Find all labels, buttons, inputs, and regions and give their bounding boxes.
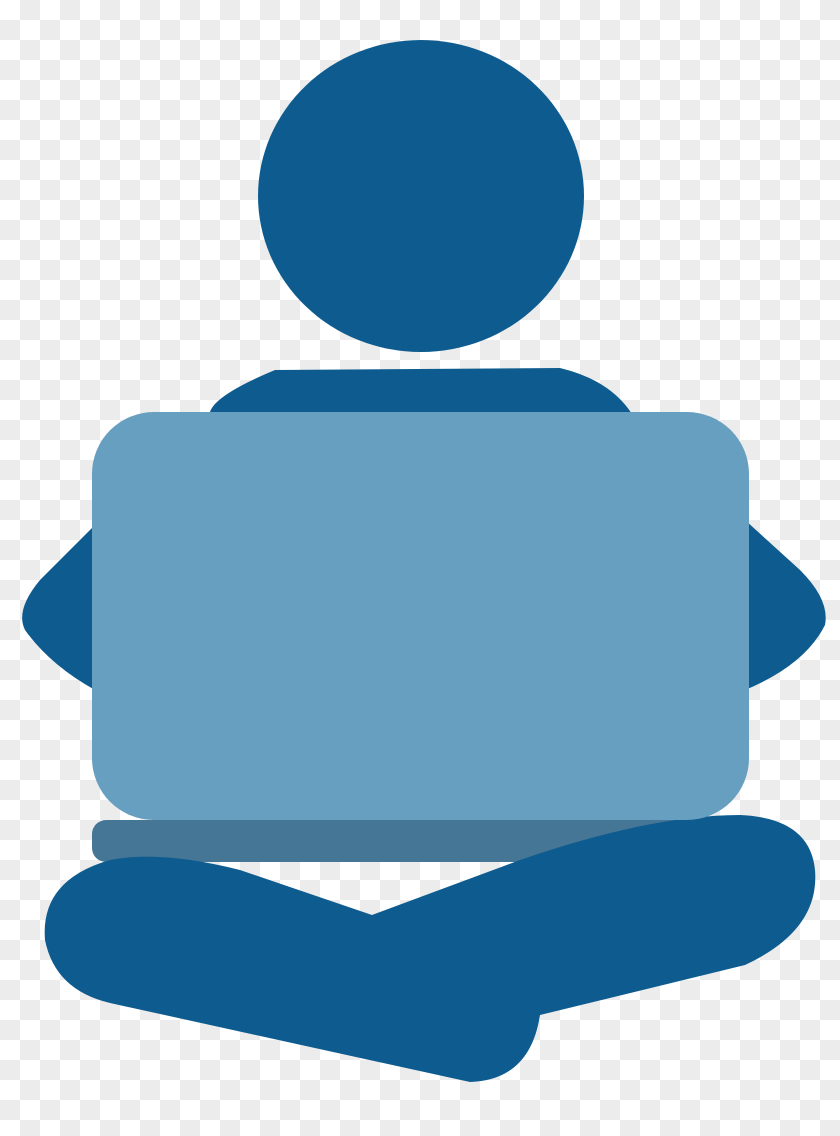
icon: arms [22,520,826,690]
icon: legs [45,815,815,1082]
icon: laptop screen [92,412,749,820]
icon: laptop base [92,820,712,862]
icon: head [258,40,584,352]
icon: shoulders [210,368,632,414]
